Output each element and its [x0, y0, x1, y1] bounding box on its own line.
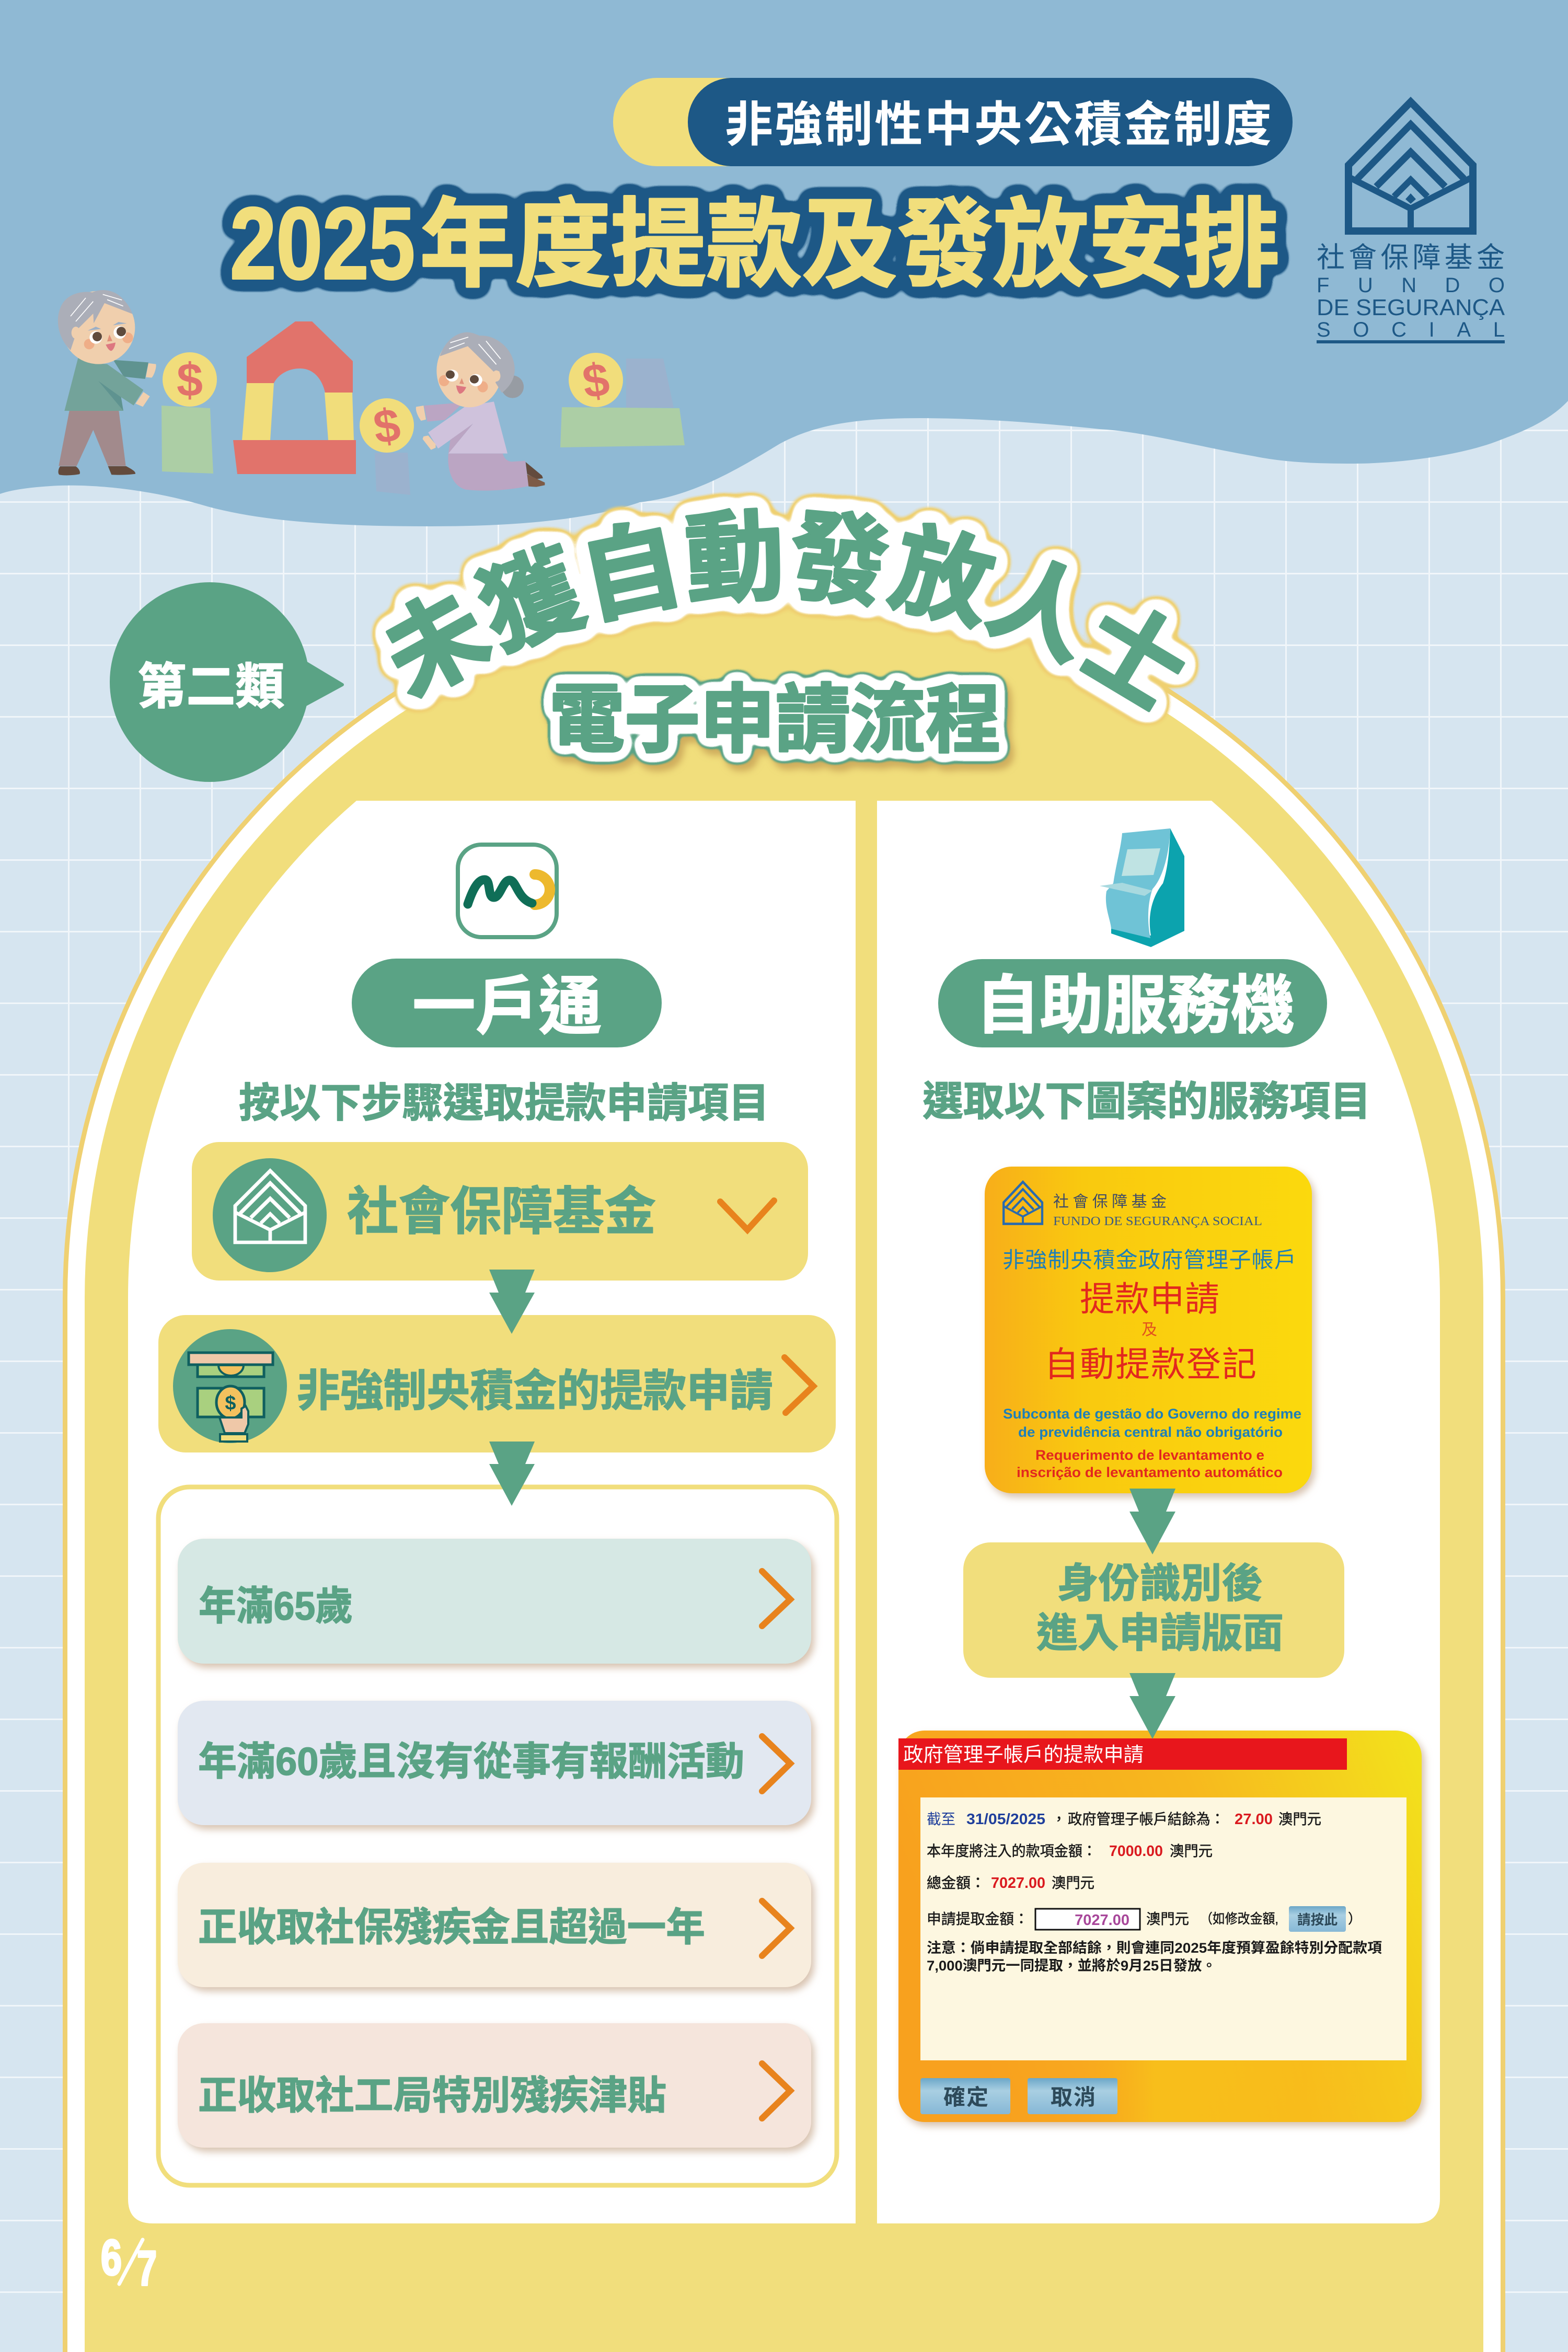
kiosk service card — [985, 1167, 1312, 1493]
heading: electronic application process: 電子申請流程 — [549, 678, 1001, 762]
option: disability pension — [178, 1863, 811, 1987]
instruction: left: 按以下步驟選取提款申請項目 — [239, 1080, 769, 1126]
arrow: card to identity step — [1129, 1489, 1175, 1554]
step: after identification: 身份識別後 — [1057, 1560, 1263, 1606]
screen: application form: 總金額： — [927, 1875, 985, 1891]
main yellow arch — [63, 577, 1505, 2352]
screen: application form: 7000.00 — [1109, 1843, 1163, 1860]
panel: right white panel — [877, 801, 1440, 2223]
badge: category two — [110, 582, 342, 782]
kiosk service card: 非強制央積金政府管理子帳戶 — [1002, 1248, 1296, 1272]
illustration: toy blocks and coins: $ — [371, 399, 403, 454]
option: aged 60 without paid activity — [178, 1701, 811, 1825]
screen: application form — [898, 1731, 1422, 2122]
screen: application form: 澳門元 — [1052, 1875, 1094, 1891]
kiosk service card: Subconta de gestão do Governo do regime — [1003, 1406, 1301, 1422]
kiosk service card: 及 — [1142, 1321, 1157, 1339]
screen: application form: 澳門元 — [1170, 1843, 1213, 1859]
arrow: identity step to form — [1129, 1673, 1175, 1739]
screen: application form: 澳門元 — [1278, 1811, 1321, 1827]
screen: application form: 政府管理子帳戶的提款申請 — [903, 1744, 1144, 1766]
screen: application form: 截至 — [927, 1811, 955, 1827]
arrow: step 2 to options — [489, 1442, 535, 1506]
screen: application form: 申請提取金額： — [927, 1911, 1029, 1927]
instruction: right: 選取以下圖案的服務項目 — [923, 1078, 1371, 1124]
subtitle pill: 非強制性中央公積金制度 — [725, 98, 1272, 152]
illustration: old man — [58, 290, 156, 475]
illustration: toy blocks and coins — [162, 321, 685, 495]
panel: left white panel — [128, 801, 856, 2223]
step: after identification: 進入申請版面 — [1036, 1610, 1284, 1656]
screen: application form: 7027.00 — [991, 1875, 1045, 1892]
pill: one-account: 一戶通 — [412, 971, 602, 1042]
page number — [101, 2230, 157, 2296]
step: provident fund withdrawal: $ — [225, 1392, 236, 1414]
arrow: step 1 to step 2 — [489, 1270, 535, 1334]
screen: application form: 取消 — [1051, 2085, 1096, 2109]
kiosk service card: FUNDO DE SEGURANÇA SOCIAL — [1053, 1215, 1262, 1228]
screen: application form: 7027.00 — [1075, 1912, 1129, 1929]
option: disability pension: 正收取社保殘疾金且超過一年 — [198, 1905, 705, 1949]
option: aged 65: 年滿65歲 — [199, 1584, 353, 1629]
screen: application form: 政府管理子帳戶結餘為： — [1068, 1811, 1225, 1827]
option: aged 65 — [178, 1539, 811, 1664]
option: special disability allowance: 正收取社工局特別殘疾津貼 — [198, 2073, 666, 2117]
logo: social security fund: 社會保障基金 — [1317, 242, 1505, 273]
main title: 年度提款及發放安排 — [420, 191, 1279, 299]
step: provident fund withdrawal — [158, 1315, 836, 1452]
step: social security fund — [192, 1142, 808, 1281]
kiosk service card: inscrição de levantamento automático — [1017, 1465, 1283, 1480]
screen: application form: （如修改金額, — [1200, 1911, 1278, 1927]
badge: category two: 第二類 — [137, 659, 284, 714]
screen: application form: 27.00 — [1235, 1811, 1273, 1828]
screen: application form: 注意：倘申請提取全部結餘，則會連同2025年度預算盈餘特別分配款項 — [927, 1940, 1382, 1956]
subtitle pill — [613, 78, 1293, 166]
kiosk service card: de previdência central não obrigatório — [1018, 1424, 1283, 1440]
panel: options container — [158, 1487, 837, 2185]
main title: 2025 — [230, 187, 415, 301]
screen: application form: 確定 — [943, 2085, 988, 2109]
step: provident fund withdrawal: 非強制央積金的提款申請 — [297, 1366, 773, 1415]
screen: application form: 澳門元 — [1146, 1911, 1189, 1927]
pill: self-service kiosk — [938, 959, 1327, 1047]
step: social security fund: 社會保障基金 — [347, 1182, 656, 1240]
illustration: toy blocks and coins: $ — [177, 354, 203, 407]
icon: self-service kiosk — [1100, 828, 1184, 947]
top blue wave banner — [0, 0, 1568, 526]
kiosk service card: 社會保障基金 — [1053, 1193, 1167, 1210]
logo: social security fund: SOCIAL — [1317, 318, 1505, 341]
icon: one-account app — [458, 845, 557, 937]
step: after identification — [963, 1542, 1344, 1678]
screen: application form: ， — [1052, 1811, 1066, 1827]
logo: social security fund: FUNDO — [1317, 274, 1505, 297]
screen: application form: ） — [1348, 1911, 1362, 1927]
screen: application form: 7,000澳門元一同提取，並將於9月25日發放。 — [927, 1958, 1216, 1974]
page number: 7 — [137, 2241, 157, 2296]
heading: arched title: 未獲自動發放人士 — [370, 490, 1200, 725]
option: special disability allowance — [178, 2023, 811, 2148]
page number: 6 — [101, 2230, 122, 2286]
pill: self-service kiosk: 自助服務機 — [976, 970, 1295, 1041]
illustration: toy blocks and coins: $ — [580, 353, 613, 409]
kiosk service card: 提款申請 — [1080, 1279, 1219, 1318]
screen: application form: 請按此 — [1297, 1912, 1338, 1928]
kiosk service card: 自動提款登記 — [1044, 1345, 1256, 1383]
logo: social security fund — [1317, 102, 1505, 343]
logo: social security fund: DE SEGURANÇA — [1317, 295, 1505, 320]
kiosk service card: Requerimento de levantamento e — [1035, 1447, 1264, 1463]
screen: application form: 本年度將注入的款項金額： — [927, 1843, 1097, 1859]
option: aged 60 without paid activity: 年滿60歲且沒有從事有報酬活動 — [198, 1739, 744, 1783]
illustration: old woman — [416, 332, 545, 491]
pill: one-account — [352, 959, 662, 1047]
screen: application form: 31/05/2025 — [966, 1811, 1045, 1828]
